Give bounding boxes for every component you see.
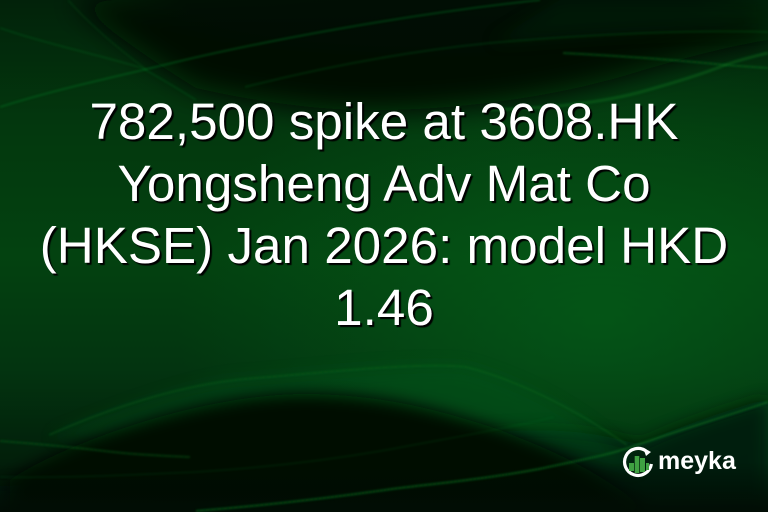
title: (HKSE) Jan 2026: model HKD — [40, 217, 728, 274]
logo: meyka icon — [622, 446, 653, 478]
title: 782,500 spike at 3608.HK — [89, 93, 679, 150]
logo: meyka wordmark: meyka — [658, 447, 736, 475]
title: 1.46 — [334, 279, 434, 336]
title: Yongsheng Adv Mat Co — [117, 155, 651, 212]
title — [40, 93, 728, 336]
